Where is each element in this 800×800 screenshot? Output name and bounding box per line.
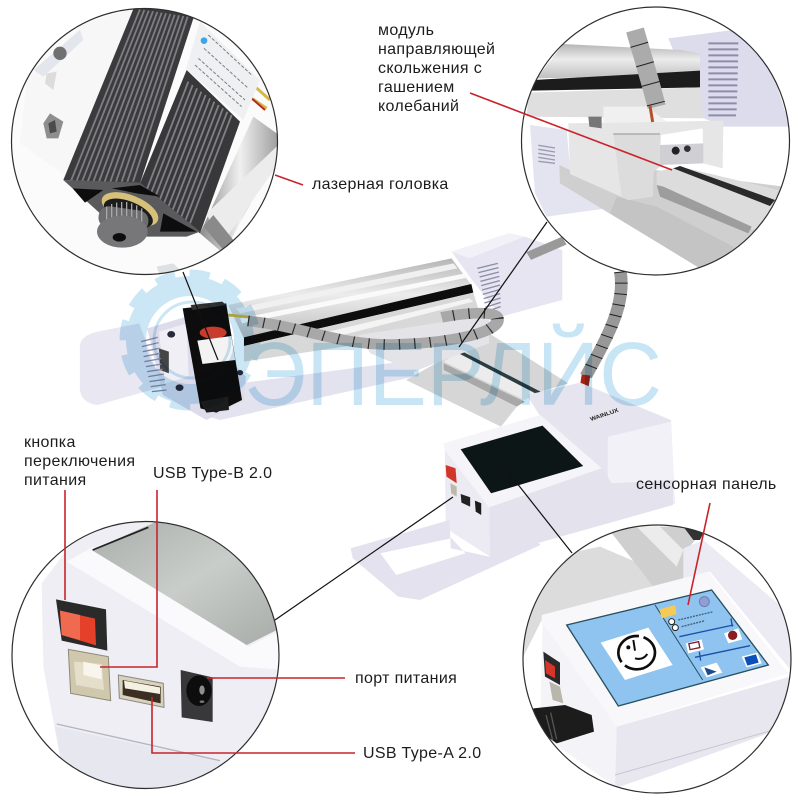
label: touch panel: сенсорная панель xyxy=(636,476,777,493)
label: guide module: модуль xyxy=(378,22,434,39)
leader line: laser head callout xyxy=(183,272,218,360)
leader line: guide module callout xyxy=(459,222,547,347)
folder icon xyxy=(659,605,677,618)
rocker switch xyxy=(56,599,107,651)
red leader: guide module label xyxy=(470,93,672,170)
X rail slot xyxy=(532,71,700,91)
heatsink left face xyxy=(63,5,195,183)
heatsink right face xyxy=(140,70,240,233)
label: guide module: гашением xyxy=(378,79,455,96)
label: guide module: направляющей xyxy=(378,41,495,58)
body front lower xyxy=(615,677,790,788)
play button xyxy=(701,663,722,677)
USB-A port xyxy=(118,675,164,707)
spec label xyxy=(186,22,260,120)
label: guide module: скольжения с xyxy=(378,60,482,77)
radio options xyxy=(669,612,713,631)
stop button xyxy=(724,628,742,643)
panel: guide module detail xyxy=(520,6,790,276)
red leader: USB Type-B xyxy=(100,490,157,667)
wires xyxy=(228,315,252,317)
case side xyxy=(42,522,278,765)
red leader: power button xyxy=(64,490,66,600)
mounting plate with screw and nut xyxy=(34,30,84,138)
screen reflection xyxy=(92,522,283,645)
Y carriage xyxy=(359,315,489,372)
label: power port: порт питания xyxy=(355,670,457,687)
label: USB Type-B: USB Type-B 2.0 xyxy=(153,465,272,482)
coil cable xyxy=(635,30,657,122)
control box: WAINLUX xyxy=(590,408,620,423)
background surface xyxy=(524,546,653,656)
red leader: laser head label xyxy=(275,175,303,185)
loop button xyxy=(686,639,704,653)
red leader: power port xyxy=(207,677,345,679)
product: laser engraver machine xyxy=(80,233,675,600)
brass ring and pulley xyxy=(97,185,163,248)
screen edge xyxy=(93,527,148,550)
top panel xyxy=(542,572,763,707)
label: USB Type-A: USB Type-A 2.0 xyxy=(363,745,481,762)
label: guide module: колебаний xyxy=(378,98,459,115)
red leader: USB Type-A xyxy=(152,697,355,753)
case seam xyxy=(57,724,220,761)
blue shape at bottom xyxy=(157,263,187,277)
label: power button: кнопка xyxy=(24,434,76,451)
usb cable xyxy=(533,705,594,743)
watermark logo xyxy=(124,274,662,425)
rail behind xyxy=(612,526,695,586)
rail behind head xyxy=(200,117,280,253)
image preview xyxy=(601,628,673,680)
side switch xyxy=(543,652,560,685)
right end block xyxy=(452,233,562,317)
circle outline xyxy=(12,8,278,274)
front end face xyxy=(63,180,200,237)
leader line: ports callout xyxy=(275,497,453,620)
Y rail xyxy=(559,165,783,268)
right block xyxy=(683,540,793,673)
panel: laser head detail xyxy=(10,8,278,276)
watermark wordmark: ЭПЕРЛЙС xyxy=(244,323,662,425)
base stand xyxy=(351,520,541,600)
top edge band xyxy=(67,547,283,670)
bottom seam xyxy=(615,730,773,775)
body front side xyxy=(540,620,617,787)
control box xyxy=(444,383,675,557)
leader line: touch panel callout xyxy=(505,468,572,553)
screen xyxy=(567,590,768,706)
coiled cable top xyxy=(529,241,564,256)
X rail lower xyxy=(527,87,703,118)
laser head xyxy=(183,302,242,413)
label: laser head: лазерная головка xyxy=(312,176,449,193)
label: power button: питания xyxy=(24,472,87,489)
coiled cable right xyxy=(584,272,621,388)
circle outline xyxy=(523,525,791,793)
sliders xyxy=(679,618,750,661)
X rail xyxy=(228,258,479,362)
Y rail xyxy=(406,333,568,427)
X rail upper xyxy=(537,44,700,78)
USB-B port xyxy=(68,649,111,701)
panel: ports detail xyxy=(11,520,280,790)
carriage plate xyxy=(141,317,246,420)
left lavender block xyxy=(530,125,607,217)
side usb xyxy=(549,682,563,703)
label: power button: переключения xyxy=(24,453,135,470)
watermark gear xyxy=(124,274,256,406)
carriage xyxy=(568,107,723,200)
panel: touch screen detail xyxy=(515,520,800,800)
wires xyxy=(252,87,270,108)
blue square button xyxy=(742,653,762,667)
lower frame bar xyxy=(202,360,414,420)
right end block xyxy=(668,30,790,127)
circle outline xyxy=(522,7,790,275)
left end cap xyxy=(80,323,163,405)
red leader: touch panel xyxy=(688,503,710,605)
grey circle xyxy=(699,597,709,607)
circle outline xyxy=(12,522,279,788)
power jack xyxy=(181,670,213,722)
coiled cable loop xyxy=(248,313,497,345)
